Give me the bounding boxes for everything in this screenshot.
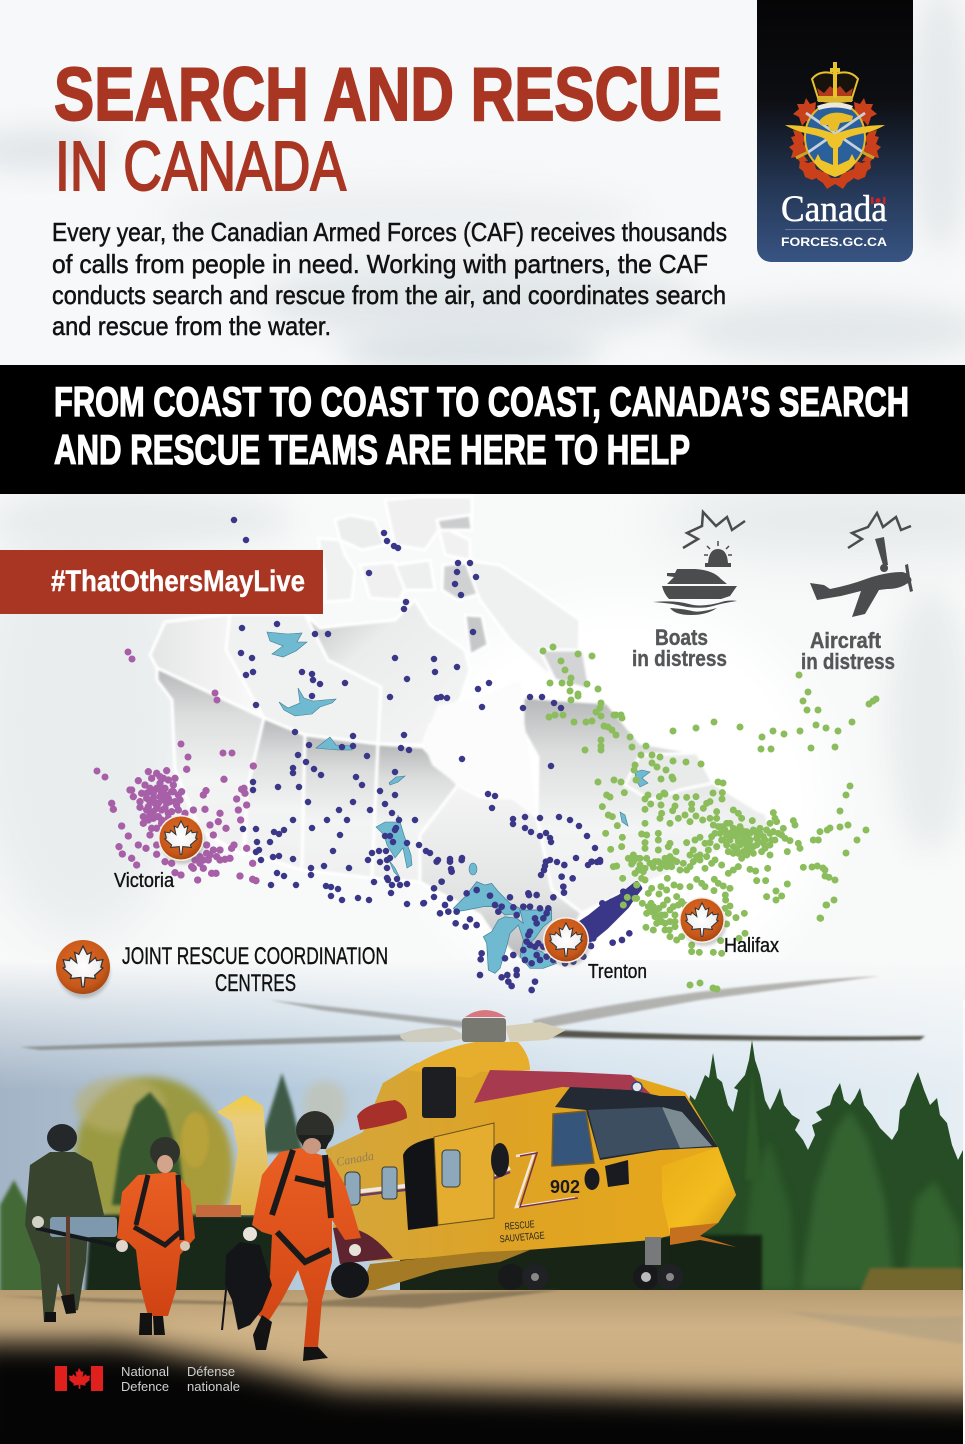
province: Ontario <box>420 785 582 960</box>
crew member: left, olive flight suit <box>25 1124 118 1322</box>
sliding door <box>434 1123 494 1225</box>
eagle and anchor <box>785 125 885 177</box>
lake: Michigan, Huron, Erie <box>483 910 557 973</box>
nose <box>662 1147 736 1235</box>
lake: Winnipeg <box>376 815 412 868</box>
black banner <box>0 365 965 494</box>
rescue lettering: RESCUE <box>504 1219 535 1233</box>
map pin: Trenton <box>543 917 590 966</box>
black vignette <box>0 1342 965 1444</box>
province: Yukon <box>150 614 264 718</box>
icon: aircraft in distress <box>810 513 913 617</box>
legend: joint rescue coordination centres <box>56 940 388 998</box>
hashtag banner <box>0 550 323 614</box>
ground <box>0 1290 963 1421</box>
label: Halifax: Halifax <box>724 935 779 957</box>
icon: boat in distress <box>653 512 745 615</box>
label: aircraft in distress: in distress <box>801 649 895 674</box>
intro text <box>52 217 727 341</box>
autumn trees, left <box>0 1073 347 1295</box>
icon: armed forces crest <box>785 62 885 189</box>
tail number: 902 <box>550 1177 580 1197</box>
label: aircraft in distress <box>801 628 895 674</box>
label: boats in distress: in distress <box>632 646 727 671</box>
lake: Manitoba small <box>389 860 400 878</box>
side window <box>552 1111 594 1166</box>
website label: FORCES.GC.CA <box>781 237 887 249</box>
footer wordmark: Defence <box>121 1380 169 1394</box>
black banner: AND RESCUE TEAMS ARE HERE TO HELP <box>54 426 690 473</box>
z stripe <box>516 1153 575 1207</box>
icon: Canadian flag <box>55 1366 103 1391</box>
Canada lettering: Canada <box>335 1149 375 1169</box>
title: IN CANADA <box>55 127 346 205</box>
maple leaves <box>789 98 881 189</box>
lake: St-Jean <box>620 812 628 826</box>
hatch and small windows <box>491 1143 629 1190</box>
label: Victoria: Victoria <box>114 870 175 892</box>
intro text: Every year, the Canadian Armed Forces (CAF) receives thousands <box>52 217 727 247</box>
footer wordmark: Défense <box>187 1365 235 1379</box>
title: SEARCH AND RESCUE <box>54 52 722 136</box>
footer wordmark <box>55 1365 240 1394</box>
crown <box>812 62 858 110</box>
life raft <box>357 1100 407 1130</box>
intro text: conducts search and rescue from the air, and coordinates search <box>52 280 726 310</box>
rotor hub and blades <box>20 976 925 1050</box>
label: aircraft in distress: Aircraft <box>810 628 882 653</box>
label: Trenton: Trenton <box>588 961 647 983</box>
crew member: right, orange suit <box>222 1111 361 1361</box>
Labrador <box>625 753 713 800</box>
sky <box>0 960 965 1300</box>
wheel fairing <box>333 1227 393 1264</box>
windows <box>345 1150 460 1205</box>
cockpit glass <box>555 1087 718 1160</box>
map pin: Victoria <box>158 815 205 864</box>
cannon <box>820 113 853 131</box>
map background <box>0 485 965 1014</box>
sponson <box>360 1250 530 1290</box>
Hudson Bay <box>423 680 537 817</box>
lake: Great Slave <box>279 688 336 716</box>
shield <box>805 103 865 171</box>
header fog background <box>0 0 965 370</box>
legend pin icon <box>56 940 110 998</box>
lake: Mistassini area <box>635 770 650 787</box>
roundel <box>632 1082 642 1092</box>
footer wordmark: National <box>121 1365 169 1379</box>
province: Saskatchewan <box>302 735 378 878</box>
red stripe <box>474 1070 660 1103</box>
footer wordmark: nationale <box>187 1380 240 1394</box>
title <box>54 52 722 205</box>
data dots: Halifax region <box>543 647 876 989</box>
lake: small northern Ontario <box>469 863 477 875</box>
engine intake <box>422 1067 456 1118</box>
dark foliage behind fuselage <box>400 1240 670 1292</box>
legend: joint rescue coordination centres: CENTRES <box>215 970 296 997</box>
province: Nunavut <box>305 600 470 745</box>
logo panel <box>757 0 913 262</box>
tail fin <box>217 1095 268 1215</box>
label: boats in distress: Boats <box>655 625 708 650</box>
province: British Columbia <box>157 668 264 855</box>
hashtag banner: #ThatOthersMayLive <box>51 565 305 598</box>
crew member: middle, orange suit <box>116 1137 195 1335</box>
arctic islands <box>318 497 590 690</box>
lake: Reindeer <box>389 776 405 785</box>
province: Manitoba <box>372 744 458 882</box>
lake: Superior <box>453 882 520 915</box>
intro text: and rescue from the water. <box>52 311 331 341</box>
legend: joint rescue coordination centres: JOINT RESCUE COORDINATION <box>122 943 388 970</box>
lake: Great Bear <box>267 632 307 657</box>
map of Canada <box>150 497 770 960</box>
data dots: Trenton region <box>234 520 640 990</box>
photo right margin <box>963 1000 965 1444</box>
province: Quebec <box>523 697 760 913</box>
photo: helicopter crew on the ground <box>0 960 965 1444</box>
landing gear <box>331 1237 683 1298</box>
stripes <box>345 1168 510 1193</box>
lake: Athabasca <box>316 737 352 750</box>
crossed swords <box>806 113 865 153</box>
lakes <box>267 632 650 973</box>
rescue lettering: SAUVETAGE <box>499 1230 545 1245</box>
map pin: Halifax <box>679 897 726 946</box>
helicopter <box>20 976 925 1298</box>
label: boats in distress <box>632 625 727 671</box>
cabin door opening <box>403 1137 438 1230</box>
data dots: Victoria region <box>97 652 256 881</box>
spruce trees, right <box>650 1040 963 1292</box>
fuselage <box>325 1063 736 1262</box>
rescue lettering <box>500 1220 544 1242</box>
Canada wordmark: Canada <box>781 189 887 230</box>
province: Northwest Territories <box>226 614 381 744</box>
province: Alberta <box>245 718 305 870</box>
intro text: of calls from people in need. Working with partners, the CAF <box>52 249 708 279</box>
atlantic provinces <box>720 805 770 850</box>
engine cowling <box>407 1042 530 1078</box>
